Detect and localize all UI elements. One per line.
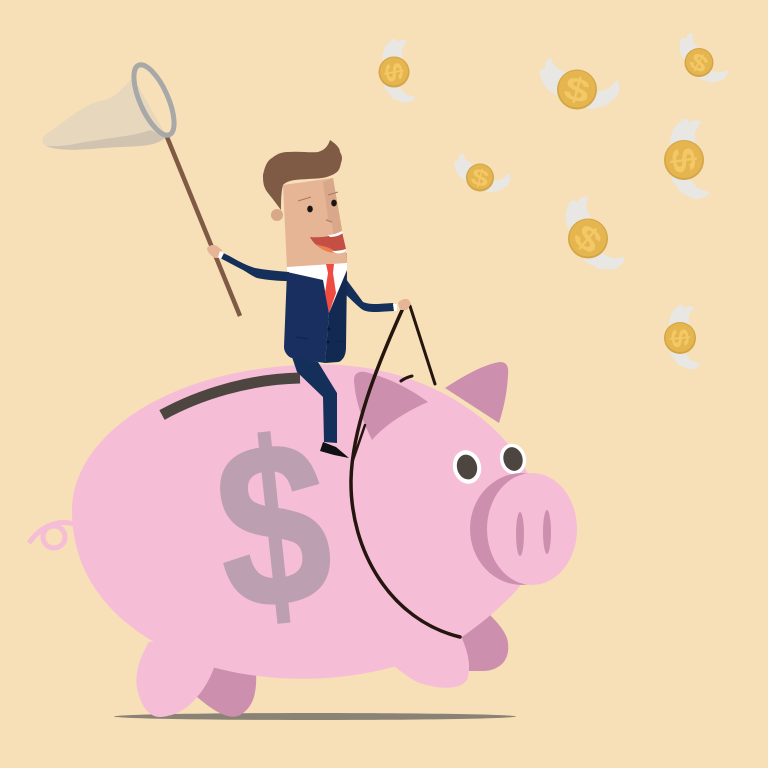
businessman bbox=[207, 140, 411, 458]
flying coin 3 bbox=[669, 30, 737, 89]
left hand bbox=[207, 245, 222, 258]
flying coin 5: $ bbox=[468, 163, 492, 192]
head bbox=[283, 178, 347, 268]
suit jacket bbox=[284, 272, 329, 363]
face features bbox=[298, 192, 346, 253]
flying coin 6: $ bbox=[566, 217, 609, 261]
flying coin 5 bbox=[452, 152, 512, 194]
flying coin 4: $ bbox=[663, 145, 703, 175]
flying coin 2 bbox=[540, 58, 619, 111]
trouser leg bbox=[292, 357, 337, 443]
pig snout bbox=[470, 473, 577, 585]
flying coin 3: $ bbox=[685, 47, 713, 78]
jacket right panel bbox=[325, 270, 347, 363]
ground shadow bbox=[114, 713, 516, 720]
flying coin 1 bbox=[367, 34, 432, 109]
shoe bbox=[320, 442, 349, 458]
right arm bbox=[345, 279, 394, 312]
pig tail bbox=[29, 523, 74, 548]
jacket buttons and pockets bbox=[296, 328, 344, 344]
butterfly net bbox=[42, 60, 240, 316]
pig body bbox=[72, 364, 540, 679]
left arm bbox=[220, 253, 289, 281]
flying coin 1: $ bbox=[378, 60, 409, 84]
pig front leg bbox=[136, 640, 214, 717]
pig far ear bbox=[445, 362, 508, 423]
flying coin 4 bbox=[651, 113, 731, 207]
face shadow bbox=[323, 178, 347, 264]
ear bbox=[271, 209, 283, 221]
shirt collar bbox=[287, 263, 347, 313]
pig eyes bbox=[449, 441, 530, 487]
reins bbox=[351, 306, 460, 637]
flying coin 7: $ bbox=[665, 327, 694, 349]
pig back leg bbox=[197, 660, 256, 717]
dollar sign on pig: $ bbox=[205, 390, 341, 660]
necktie bbox=[325, 264, 336, 313]
pig right front leg bbox=[390, 636, 469, 688]
flying coin 2: $ bbox=[560, 70, 594, 111]
flying coin 7 bbox=[653, 300, 718, 375]
flying coin 6 bbox=[547, 190, 641, 281]
pig near ear bbox=[354, 372, 428, 440]
pig far front leg bbox=[455, 615, 508, 671]
coin slot bbox=[162, 378, 300, 415]
right hand bbox=[398, 299, 411, 310]
hair bbox=[263, 140, 342, 210]
